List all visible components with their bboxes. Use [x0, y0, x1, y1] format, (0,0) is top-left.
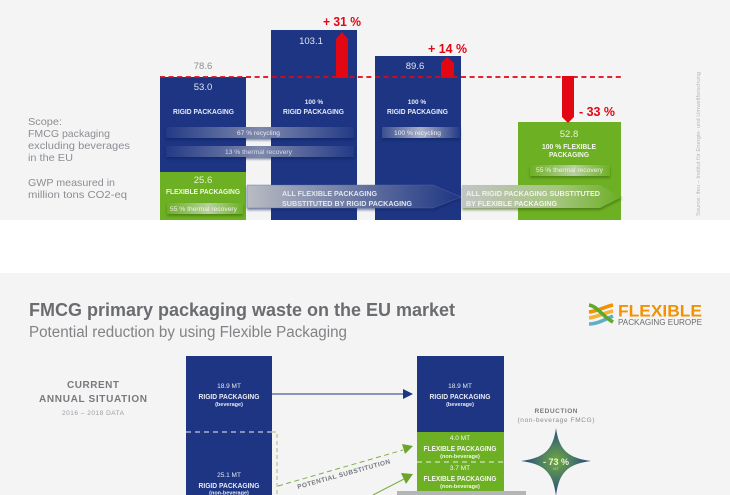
subtitle: Potential reduction by using Flexible Packaging — [29, 324, 347, 341]
beverage rigid labels: RIGID PACKAGING — [198, 394, 260, 401]
flexible labels 4.0 MT — [424, 435, 497, 460]
baseline dashed line — [160, 76, 621, 78]
gray base bar — [397, 491, 526, 495]
label: 100 % FLEXIBLE — [542, 144, 596, 151]
flexible labels 4.0 MT: FLEXIBLE PACKAGING — [424, 446, 497, 453]
beverage rigid labels: 18.9 MT — [217, 383, 241, 390]
blue arrow — [272, 389, 413, 399]
title: FMCG primary packaging waste on the EU market — [29, 300, 455, 320]
beverage rigid labels: (beverage) — [215, 402, 243, 408]
scope text block: Scope: — [28, 116, 62, 128]
arrow: rigid substituted by flexible: ALL RIGID PACKAGING SUBSTITUTED — [466, 191, 600, 198]
label packaging: PACKAGING — [549, 152, 590, 159]
star value: - 73 % — [543, 457, 569, 467]
recycling band 100%: 100 % recycling — [394, 130, 441, 137]
label +14%: + 14 % — [428, 42, 467, 56]
current situation heading: CURRENT — [67, 380, 119, 391]
value total: 78.6 — [194, 61, 212, 72]
flexible labels 4.0 MT: 4.0 MT — [450, 435, 470, 442]
recycling band 100% — [382, 127, 460, 140]
reduction label: (non-beverage FMCG) — [518, 417, 594, 424]
bar: all flexible — [518, 122, 621, 220]
scope text block: GWP measured in — [28, 177, 115, 189]
value: 103.1 — [299, 36, 323, 47]
arrow: rigid substituted by flexible — [462, 185, 622, 210]
thermal recovery band flexible: 55 % thermal recovery — [170, 206, 238, 213]
recycling band 67%: 67 % recycling — [237, 130, 280, 137]
bottom panel background — [0, 273, 730, 495]
reduction label — [518, 408, 594, 424]
potential substitution label: POTENTIAL SUBSTITUTION — [297, 458, 391, 491]
logo subline: PACKAGING EUROPE — [618, 318, 702, 327]
scope text block: excluding beverages — [28, 140, 130, 152]
non-beverage rigid labels: 25.1 MT — [217, 472, 241, 479]
thermal recovery band all flexible — [530, 165, 610, 178]
arrow: flexible substituted by rigid: SUBSTITUTED BY RIGID PACKAGING — [282, 201, 413, 208]
bar: all rigid, current recycling — [271, 30, 357, 220]
red arrow up 31% — [336, 32, 348, 78]
top panel background — [0, 0, 730, 220]
thermal recovery band flexible — [167, 203, 243, 216]
scope text block — [28, 116, 130, 201]
label rigid packaging: RIGID PACKAGING — [173, 109, 235, 116]
non-beverage rigid labels — [198, 472, 260, 495]
scope text block: FMCG packaging — [28, 128, 110, 140]
value flexible: 25.6 — [194, 175, 212, 186]
label: 100 % — [408, 99, 426, 106]
label rigid packaging: RIGID PACKAGING — [283, 109, 345, 116]
label flexible packaging: FLEXIBLE PACKAGING — [166, 189, 241, 196]
scope text block: million tons CO2-eq — [28, 189, 127, 201]
label +31%: + 31 % — [323, 15, 361, 29]
reduction label: REDUCTION — [534, 408, 578, 415]
label: 100 % — [305, 99, 323, 106]
reduction star — [521, 428, 591, 495]
flexible labels 3.7 MT: FLEXIBLE PACKAGING — [424, 476, 497, 483]
flexible labels 3.7 MT: 3.7 MT — [450, 465, 470, 472]
logo ribbons — [589, 305, 613, 324]
beverage rigid labels — [198, 383, 260, 408]
beverage rigid labels: 18.9 MT — [448, 383, 472, 390]
current situation heading: 2016 – 2018 DATA — [62, 410, 125, 417]
flexible labels 3.7 MT — [424, 465, 497, 490]
bar: current mix — [160, 61, 246, 220]
dashed connector — [272, 432, 277, 495]
value: 89.6 — [406, 61, 424, 72]
recycling band 67% — [166, 127, 354, 140]
arrow: rigid substituted by flexible: BY FLEXIBLE PACKAGING — [466, 201, 558, 208]
solid green arrow — [373, 473, 413, 495]
beverage rigid labels: (beverage) — [446, 402, 474, 408]
bar: all rigid, full recycling — [375, 56, 461, 220]
arrow: flexible substituted by rigid: ALL FLEXIBLE PACKAGING — [282, 191, 378, 198]
logo wordmark: FLEXIBLE — [618, 302, 702, 320]
scope text block: in the EU — [28, 152, 73, 164]
beverage rigid labels: RIGID PACKAGING — [430, 394, 491, 401]
current situation heading: ANNUAL SITUATION — [39, 394, 147, 405]
star unit: MT — [553, 466, 559, 471]
thermal recovery band 13% — [166, 146, 354, 159]
dashed green arrow — [278, 444, 413, 486]
arrow: flexible substituted by rigid — [247, 185, 461, 210]
thermal recovery band all flexible: 55 % thermal recovery — [536, 167, 604, 174]
bar: potential situation — [417, 356, 504, 495]
beverage rigid labels — [430, 383, 491, 408]
value rigid: 53.0 — [194, 82, 212, 93]
bar: current situation — [186, 356, 272, 495]
thermal recovery band 13%: 13 % thermal recovery — [225, 149, 293, 156]
red arrow down 33% — [562, 76, 574, 123]
current situation heading — [39, 380, 147, 417]
label -33%: - 33 % — [579, 105, 615, 119]
flexible labels 3.7 MT: (non-beverage) — [440, 484, 480, 490]
logo: Flexible Packaging Europe — [589, 302, 702, 327]
flexible labels 4.0 MT: (non-beverage) — [440, 454, 480, 460]
non-beverage rigid labels: RIGID PACKAGING — [198, 483, 260, 490]
red arrow up 14% — [441, 57, 454, 78]
value: 52.8 — [560, 129, 578, 140]
label rigid packaging: RIGID PACKAGING — [387, 109, 449, 116]
source note: Source: ifeu – Institut für Energie- und Umweltforschung — [696, 72, 702, 216]
